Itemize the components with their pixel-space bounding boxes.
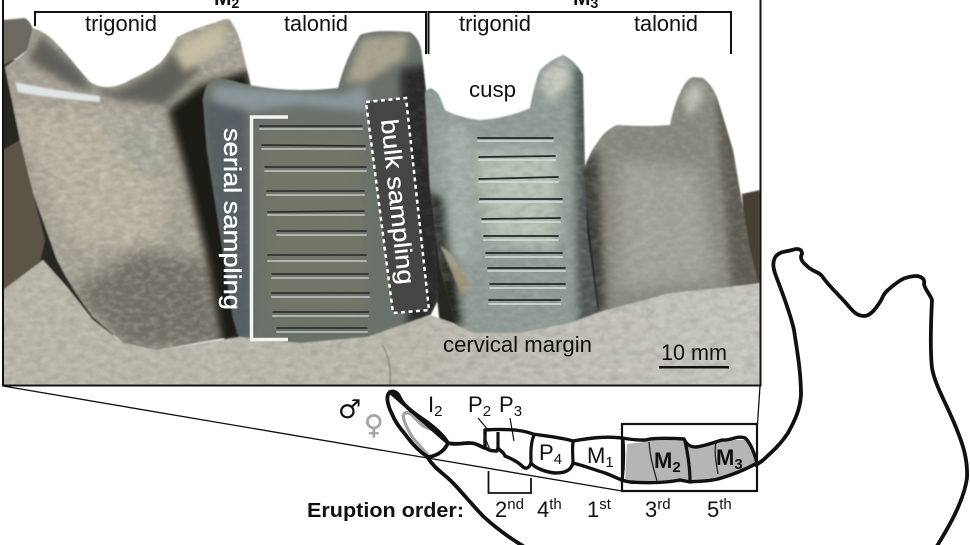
tooth dividers — [498, 432, 690, 482]
photo: left stub tooth — [3, 140, 45, 290]
incisor gray inner line — [403, 413, 446, 455]
tooth labels: 2 — [434, 403, 442, 420]
tooth labels: P — [499, 392, 514, 417]
eruption order values: 2 — [495, 497, 507, 522]
tooth labels: 2 — [672, 459, 681, 476]
labels: trigonid and talonid: talonid — [634, 11, 698, 36]
tooth labels: 4 — [554, 451, 562, 468]
eruption order values: st — [599, 496, 612, 513]
eruption order values: 5 — [707, 497, 719, 522]
grooves: M3 serial samples — [478, 138, 565, 304]
eruption order values — [495, 496, 732, 522]
eruption order values: 4 — [537, 497, 549, 522]
eruption order values: nd — [507, 496, 524, 513]
tooth labels: 3 — [514, 403, 522, 420]
tooth labels: 2 — [483, 403, 491, 420]
tooth labels: 3 — [734, 456, 743, 473]
tooth labels: P — [468, 392, 483, 417]
box: M2 and M3 highlight — [622, 424, 757, 491]
eruption order values: 3 — [645, 497, 657, 522]
photo: crack in bone — [382, 345, 390, 385]
leader: P2 — [478, 418, 489, 431]
eruption order values: th — [719, 496, 732, 513]
photo: brown bone behind M3 — [742, 190, 760, 285]
labels: trigonid and talonid: trigonid — [85, 11, 157, 36]
eruption order values: th — [549, 496, 562, 513]
photo: dark gaps behind teeth — [3, 60, 608, 360]
label: cusp: cusp — [469, 77, 516, 102]
eruption order values: 1 — [587, 497, 599, 522]
photo: M2 talonid — [200, 20, 445, 350]
label: serial sampling: serial sampling — [218, 128, 245, 310]
jaw outline — [387, 249, 967, 545]
labels: trigonid and talonid: talonid — [284, 11, 348, 36]
photo: M3 trigonid — [420, 50, 605, 340]
tooth labels: M — [654, 448, 672, 473]
icon: female symbol: ♀ — [364, 410, 384, 441]
leader: P3 — [510, 418, 514, 441]
molar inner lines — [484, 435, 718, 481]
diagram: lower jaw — [387, 249, 967, 545]
molars gray fill — [625, 439, 757, 483]
tooth labels: M — [716, 445, 734, 470]
icon: male symbol: ♂ — [338, 395, 361, 425]
grooves: M2 serial samples — [260, 126, 369, 332]
tooth labels: M — [587, 443, 605, 468]
bracket: P2 and P3 — [488, 471, 531, 493]
bracket: serial sampling — [252, 117, 288, 340]
frame: photograph border — [3, 0, 760, 386]
bracket: M2 and M3 — [35, 12, 731, 54]
callout: bulk sampling: bulk sampling — [375, 118, 419, 286]
connector: zoom lines from jaw to photo — [3, 386, 760, 491]
labels: trigonid and talonid — [85, 11, 698, 36]
eruption order values: rd — [657, 496, 671, 513]
tooth labels — [428, 392, 743, 476]
scale bar: 10 mm: 10 mm — [661, 340, 727, 365]
label: cervical margin: cervical margin — [443, 332, 592, 357]
photo: M2 trigonid — [4, 18, 252, 351]
tooth labels: I — [428, 392, 434, 417]
photo: M3 talonid — [583, 76, 758, 312]
panel: tooth photograph — [0, 0, 765, 390]
photo: top-left tooth tip — [3, 18, 33, 65]
label: eruption order: Eruption order: — [307, 499, 464, 522]
photo: jaw bone — [0, 255, 765, 390]
labels: trigonid and talonid: trigonid — [459, 11, 531, 36]
tooth labels: 1 — [605, 454, 614, 471]
callout: bulk sampling — [366, 98, 429, 313]
tooth row outline — [485, 429, 757, 483]
tooth labels: P — [539, 440, 554, 465]
